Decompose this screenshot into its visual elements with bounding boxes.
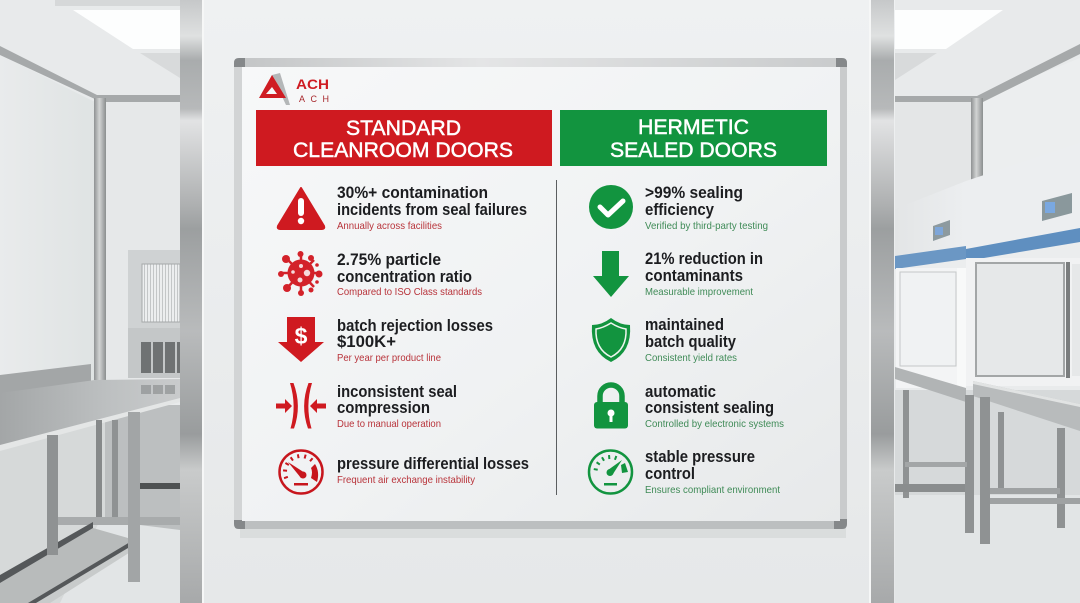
- icon: red pressure gauge: [280, 450, 322, 494]
- item: inconsistent seal compression: compression: [337, 398, 430, 417]
- heading: hermetic sealed doors: [560, 110, 827, 166]
- board shadow: [240, 528, 846, 538]
- item: contaminant reduction: contaminants: [645, 266, 743, 285]
- ceiling light right: [895, 10, 1003, 49]
- icon: warning triangle: [278, 188, 324, 229]
- logo: ACH: ACH: [296, 76, 329, 92]
- item: contaminant reduction: Measurable improvement: [645, 286, 753, 298]
- item: contamination incidents: incidents from seal failures: [337, 200, 527, 219]
- item: automatic sealing: automatic: [645, 382, 716, 401]
- item: inconsistent seal compression: Due to manual operation: [337, 418, 441, 430]
- item: contamination incidents: 30%+ contamination: [337, 183, 488, 202]
- panel: standard door problems: [276, 183, 529, 494]
- heading: hermetic sealed doors: HERMETIC: [638, 115, 749, 139]
- item: batch quality: [592, 315, 737, 364]
- logo: ACH: ACH: [299, 94, 329, 104]
- item: inconsistent seal compression: inconsistent seal: [337, 382, 457, 401]
- item: sealing efficiency: >99% sealing: [645, 183, 743, 202]
- column divider: [556, 180, 557, 495]
- item: contamination incidents: [278, 183, 527, 232]
- item: pressure differential losses: [280, 450, 529, 494]
- right cleanroom scene: [895, 0, 1080, 603]
- item: stable pressure control: [589, 447, 780, 496]
- item: contaminant reduction: 21% reduction in: [645, 249, 763, 268]
- fume hoods: [895, 181, 966, 268]
- item: pressure differential losses: Frequent air exchange instability: [337, 474, 476, 486]
- icon: check circle: [589, 185, 633, 229]
- comparison board: [234, 58, 847, 529]
- item: batch quality: maintained: [645, 315, 724, 334]
- heading: standard cleanroom doors: STANDARD: [346, 116, 461, 140]
- bench tops: [895, 367, 966, 402]
- left cleanroom scene: [0, 0, 180, 603]
- item: particle concentration: Compared to ISO Class standards: [337, 286, 482, 298]
- icon: green pressure gauge: [589, 450, 632, 494]
- item: particle concentration: concentration ratio: [337, 267, 472, 286]
- item: batch rejection losses: batch rejection losses: [337, 316, 493, 335]
- item: sealing efficiency: [589, 183, 768, 232]
- item: automatic sealing: Controlled by electronic systems: [645, 418, 784, 430]
- item: contamination incidents: Annually across facilities: [337, 220, 442, 232]
- board frame: [234, 58, 847, 529]
- item: particle concentration: [278, 250, 482, 298]
- item: automatic sealing: [594, 382, 784, 430]
- heading: standard cleanroom doors: [256, 110, 552, 166]
- control panels: [933, 220, 950, 241]
- icon: dollar down arrow: $: [295, 323, 308, 349]
- item: inconsistent seal compression: [276, 382, 457, 430]
- item: batch quality: Consistent yield rates: [645, 352, 737, 364]
- item: contaminant reduction: [593, 249, 763, 298]
- item: sealing efficiency: Verified by third-party testing: [645, 220, 768, 232]
- icon: dollar down arrow: [278, 317, 324, 362]
- item: pressure differential losses: pressure differential losses: [337, 454, 529, 473]
- item: automatic sealing: consistent sealing: [645, 398, 774, 417]
- item: stable pressure control: Ensures compliant environment: [645, 484, 780, 496]
- panel: hermetic door benefits: [589, 183, 784, 496]
- item: stable pressure control: control: [645, 464, 695, 483]
- item: batch rejection losses: $100K+: [337, 332, 396, 351]
- icon: compression arrows: [276, 383, 326, 428]
- heading: standard cleanroom doors: CLEANROOM DOORS: [293, 138, 513, 162]
- item: batch rejection losses: Per year per product line: [337, 352, 441, 364]
- logo: ACH: [259, 73, 329, 105]
- item: particle concentration: 2.75% particle: [337, 250, 441, 269]
- stainless steel pillars: [180, 0, 894, 603]
- heading: hermetic sealed doors: SEALED DOORS: [610, 138, 777, 162]
- icon: green down arrow: [593, 251, 629, 297]
- icon: virus particle: [278, 251, 322, 296]
- icon: padlock: [594, 385, 628, 428]
- icon: shield: [592, 318, 630, 362]
- item: batch rejection losses: [278, 316, 493, 364]
- item: stable pressure control: stable pressure: [645, 447, 755, 466]
- item: batch quality: batch quality: [645, 332, 736, 351]
- item: sealing efficiency: efficiency: [645, 200, 714, 219]
- ceiling light left: [73, 10, 180, 49]
